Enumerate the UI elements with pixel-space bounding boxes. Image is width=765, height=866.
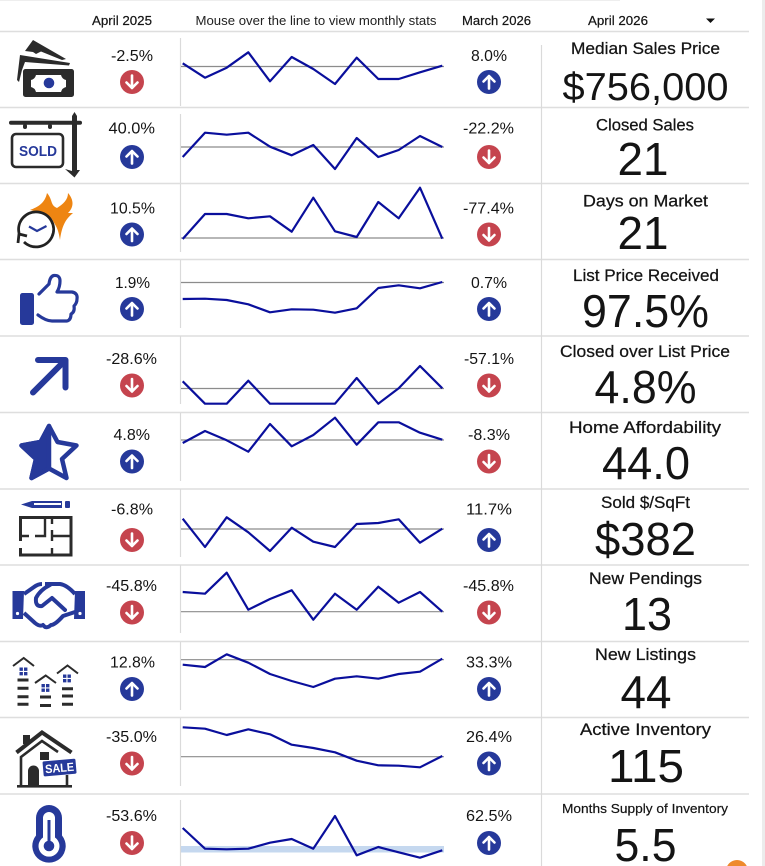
metric value: $756,000	[562, 66, 728, 109]
header: chart hint: Mouse over the line to view monthly stats	[196, 14, 436, 28]
row: Sold $/SqFt	[20, 489, 696, 565]
sparkline	[180, 642, 444, 710]
header row	[92, 14, 715, 28]
row: New Pendings	[12, 565, 702, 640]
metric label: Closed over List Price	[560, 343, 730, 361]
sparkline	[180, 413, 444, 481]
change vs April 2025: 40.0%	[108, 120, 155, 138]
icon: dropdown caret	[706, 18, 715, 23]
metric label: Median Sales Price	[571, 40, 720, 58]
icon: cash	[17, 40, 74, 97]
badge: orange help button	[726, 860, 748, 866]
sparkline	[180, 565, 444, 633]
row: Days on Market	[18, 184, 708, 259]
icon: down arrow	[477, 450, 501, 474]
icon: up arrow	[120, 297, 144, 321]
sparkline	[180, 38, 444, 106]
icon: floor plan	[20, 501, 71, 555]
icon: down arrow	[120, 374, 144, 398]
sparkline	[180, 184, 444, 252]
change vs April 2025: 10.5%	[110, 200, 155, 218]
icon: down arrow	[120, 752, 144, 776]
icon: up arrow	[477, 831, 501, 855]
change vs April 2025: -35.0%	[106, 729, 157, 746]
sparkline	[180, 114, 444, 183]
metric value: 4.8%	[594, 361, 696, 413]
icon: clock on fire	[18, 193, 73, 248]
change vs April 2025: -45.8%	[106, 578, 157, 595]
icon: sold sign: SOLD	[19, 144, 57, 160]
change vs March 2026: 0.7%	[471, 275, 507, 292]
icon: diagonal arrow	[33, 360, 66, 392]
row: List Price Received	[20, 260, 719, 337]
metric label: Sold $/SqFt	[601, 494, 690, 512]
icon: up arrow	[477, 297, 501, 321]
icon: up arrow	[120, 145, 144, 169]
icon: down arrow	[120, 600, 144, 624]
change vs March 2026: -77.4%	[463, 200, 514, 218]
icon: sold sign	[9, 112, 82, 178]
metric label: List Price Received	[573, 267, 719, 285]
icon: up arrow	[477, 752, 501, 776]
metric label: Home Affordability	[569, 419, 722, 437]
change vs April 2025: 1.9%	[115, 275, 150, 292]
icon: house for sale	[16, 732, 77, 788]
row: Home Affordability	[22, 413, 722, 489]
metric value: 21	[618, 207, 668, 259]
change vs March 2026: 26.4%	[466, 729, 512, 746]
sparkline	[180, 260, 444, 328]
icon: up arrow	[477, 677, 501, 701]
metric label: Closed Sales	[596, 116, 694, 134]
sparkline	[180, 489, 444, 557]
metric label: New Pendings	[589, 570, 702, 588]
row: Active Inventory	[16, 718, 712, 792]
row: Months Supply of Inventory	[32, 800, 729, 866]
change vs March 2026: 8.0%	[471, 48, 507, 65]
change vs April 2025: -2.5%	[111, 48, 153, 65]
icon: down arrow	[477, 600, 501, 624]
change vs March 2026: -8.3%	[468, 427, 510, 444]
metric value: 21	[618, 133, 668, 185]
header: April 2025: April 2025	[92, 14, 152, 28]
icon: down arrow	[477, 145, 501, 169]
change vs March 2026: 11.7%	[466, 502, 512, 518]
icon: handshake	[12, 584, 85, 627]
sparkline	[180, 336, 444, 404]
icon: up arrow	[477, 70, 501, 94]
metric label: New Listings	[595, 646, 696, 664]
change vs March 2026: -57.1%	[464, 351, 514, 368]
metric value: $382	[595, 513, 696, 565]
icon: half star	[22, 426, 76, 478]
sparkline	[180, 800, 444, 866]
metric value: 44.0	[602, 437, 690, 489]
icon: down arrow	[120, 831, 144, 855]
metric value: 97.5%	[582, 285, 709, 337]
icon: down arrow	[477, 374, 501, 398]
icon: down arrow	[120, 70, 144, 94]
change vs April 2025: -28.6%	[106, 351, 157, 368]
row: Closed over List Price	[33, 336, 730, 413]
change vs March 2026: 33.3%	[466, 654, 512, 672]
icon: up arrow	[120, 677, 144, 701]
row: New Listings	[13, 642, 696, 718]
metric label: Months Supply of Inventory	[562, 801, 729, 816]
metric label: Active Inventory	[580, 721, 712, 739]
change vs April 2025: -6.8%	[111, 502, 153, 518]
metric value: 115	[608, 740, 684, 792]
metric value: 13	[622, 588, 672, 640]
icon: down arrow	[120, 528, 144, 552]
metric label: Days on Market	[583, 192, 708, 210]
row: Closed Sales	[9, 112, 694, 185]
icon: up arrow	[477, 528, 501, 552]
sparkline	[180, 718, 444, 786]
change vs April 2025: 4.8%	[114, 427, 150, 444]
icon: up arrow	[120, 222, 144, 246]
change vs March 2026: -45.8%	[463, 578, 514, 595]
icon: houses	[13, 658, 78, 706]
icon: thermometer	[32, 805, 66, 863]
row: Median Sales Price	[17, 38, 728, 109]
change vs March 2026: 62.5%	[466, 808, 512, 825]
header: March 2026: March 2026	[462, 14, 531, 28]
icon: thumbs up	[20, 275, 77, 325]
change vs April 2025: -53.6%	[106, 808, 157, 825]
metric value: 44	[620, 666, 672, 718]
header: April 2026: April 2026	[588, 14, 648, 28]
change vs April 2025: 12.8%	[110, 654, 155, 672]
icon: down arrow	[477, 222, 501, 246]
change vs March 2026: -22.2%	[463, 120, 514, 138]
icon: up arrow	[120, 450, 144, 474]
icon: house for sale: SALE	[45, 760, 75, 776]
